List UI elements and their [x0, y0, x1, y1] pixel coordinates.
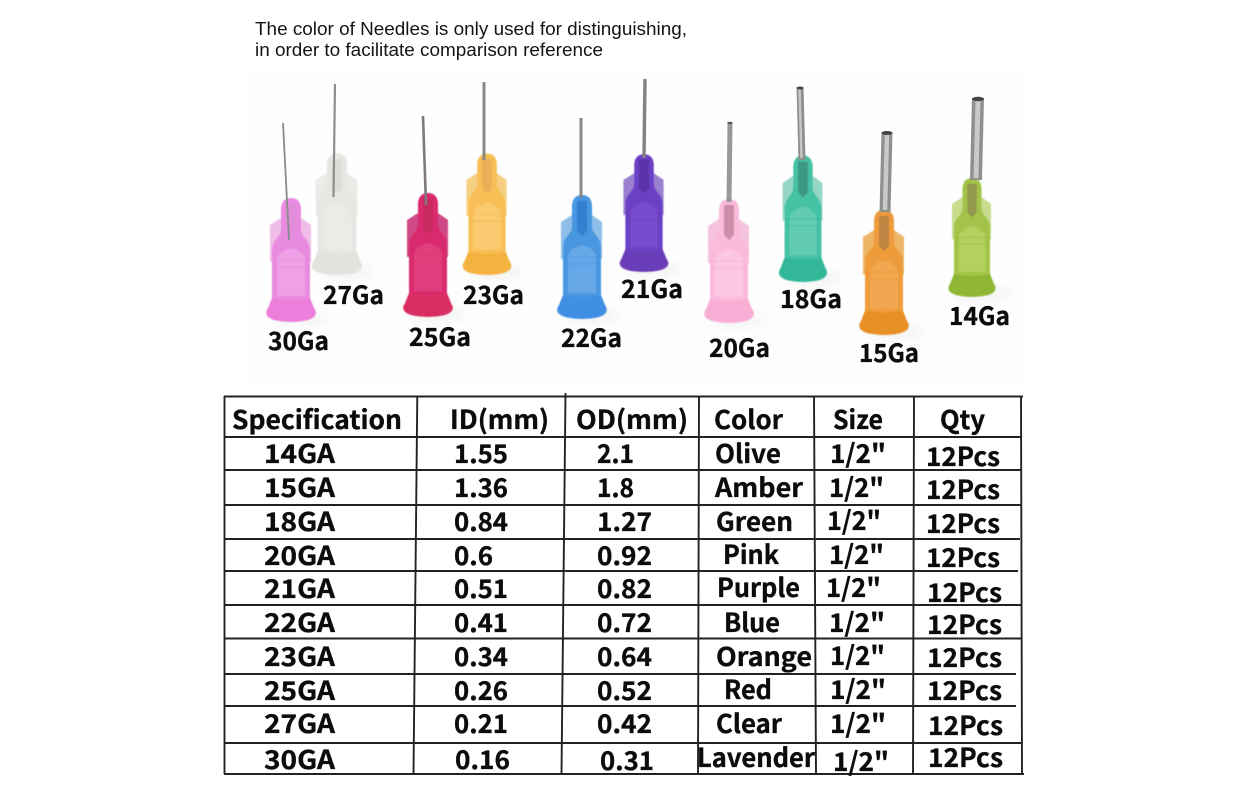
- needle 23Ga amber: [463, 82, 524, 276]
- row 22GA: 1/2": [829, 603, 885, 640]
- row 30GA: [264, 738, 1003, 779]
- row 25GA: 12Pcs: [927, 671, 1002, 708]
- row 15GA: [264, 468, 1000, 507]
- row 20GA: Pink: [723, 535, 779, 572]
- row 14GA: 2.1: [597, 434, 634, 471]
- row 21GA: 0.51: [454, 569, 508, 606]
- row 20GA: 0.6: [454, 536, 493, 573]
- row 22GA: 22GA: [264, 603, 335, 640]
- table header: Qty: [940, 400, 985, 437]
- gauge labels on the photo: 25Ga: [409, 318, 471, 354]
- needle 27Ga clear: [312, 84, 374, 276]
- note text: in order to facilitate comparison reference: [255, 39, 603, 60]
- row 15GA: 12Pcs: [926, 470, 1000, 507]
- row 20GA: 12Pcs: [926, 538, 1000, 575]
- row 20GA: [264, 535, 1000, 575]
- row 22GA: [264, 603, 1002, 642]
- table header: ID(mm): [450, 400, 549, 437]
- row 30GA: 12Pcs: [928, 738, 1003, 775]
- photo panel: coloured needles: [245, 72, 1023, 390]
- row 27GA: [264, 704, 1003, 743]
- specification table: [224, 393, 1024, 779]
- gauge labels on the photo: 20Ga: [709, 329, 770, 365]
- row 14GA: [264, 434, 1000, 474]
- row 18GA: Green: [716, 502, 793, 539]
- table header: Size: [833, 400, 883, 437]
- gauge labels on the photo: 21Ga: [621, 270, 683, 306]
- row 23GA: 0.34: [454, 637, 508, 674]
- table header: Color: [714, 400, 784, 437]
- table header: OD(mm): [576, 400, 688, 437]
- row 18GA: 12Pcs: [926, 504, 1000, 541]
- table grid: [224, 393, 1024, 774]
- row 25GA: Red: [724, 670, 772, 707]
- row 22GA: 0.41: [454, 603, 508, 640]
- row 30GA: 1/2": [833, 742, 889, 779]
- table header: [232, 400, 985, 437]
- gauge labels on the photo: 15Ga: [859, 334, 919, 370]
- row 27GA: 0.42: [597, 704, 652, 741]
- gauge labels on the photo: 27Ga: [323, 276, 384, 312]
- needle 18Ga green: [779, 86, 844, 283]
- row 15GA: 1.36: [454, 468, 508, 505]
- table header: Specification: [232, 400, 402, 437]
- needle 20Ga pink: [704, 122, 768, 324]
- row 25GA: 1/2": [830, 670, 886, 707]
- row 25GA: 0.26: [454, 671, 508, 708]
- gauge labels on the photo: 14Ga: [949, 297, 1010, 333]
- row 23GA: Orange: [716, 637, 812, 674]
- row 18GA: 0.84: [454, 502, 508, 539]
- gauge labels on the photo: 18Ga: [780, 280, 842, 316]
- row 30GA: 0.31: [600, 741, 654, 778]
- row 14GA: 14GA: [264, 434, 335, 471]
- row 21GA: 1/2": [826, 568, 881, 605]
- row 22GA: Blue: [724, 603, 780, 640]
- row 22GA: 0.72: [597, 603, 652, 640]
- row 27GA: 27GA: [264, 704, 335, 741]
- row 18GA: 18GA: [264, 502, 335, 539]
- row 21GA: 21GA: [264, 569, 335, 606]
- gauge labels on the photo: 23Ga: [463, 276, 524, 312]
- row 20GA: 0.92: [597, 536, 652, 573]
- needle 15Ga amber: [859, 131, 924, 336]
- row 27GA: 1/2": [830, 704, 886, 741]
- row 21GA: [264, 568, 1002, 610]
- row 21GA: 0.82: [597, 569, 652, 606]
- row 15GA: 15GA: [264, 468, 335, 505]
- row 30GA: Lavender: [697, 738, 816, 775]
- row 18GA: [264, 501, 1000, 541]
- row 23GA: 0.64: [597, 637, 652, 674]
- needle 25Ga red: [403, 116, 468, 318]
- row 27GA: 0.21: [454, 704, 508, 741]
- row 30GA: 0.16: [455, 740, 510, 777]
- row 23GA: 23GA: [264, 637, 335, 674]
- needle 22Ga blue: [557, 118, 622, 320]
- needle 21Ga purple: [620, 79, 682, 273]
- row 15GA: 1/2": [829, 468, 884, 505]
- gauge labels on the photo: 22Ga: [561, 319, 622, 355]
- row 20GA: 1/2": [829, 535, 884, 572]
- note text: [255, 18, 687, 60]
- row 18GA: 1.27: [597, 502, 652, 539]
- row 21GA: Purple: [717, 568, 800, 605]
- row 25GA: 25GA: [264, 671, 335, 708]
- row 14GA: 12Pcs: [926, 437, 1000, 474]
- row 20GA: 20GA: [264, 536, 335, 573]
- row 18GA: 1/2": [827, 501, 881, 538]
- row 27GA: Clear: [716, 704, 783, 741]
- row 22GA: 12Pcs: [927, 605, 1002, 642]
- row 27GA: 12Pcs: [928, 706, 1003, 743]
- row 23GA: 12Pcs: [927, 638, 1002, 675]
- row 25GA: 0.52: [597, 671, 652, 708]
- row 15GA: 1.8: [597, 468, 634, 505]
- row 14GA: 1/2": [830, 434, 886, 471]
- gauge labels on the photo: 30Ga: [268, 322, 329, 358]
- row 14GA: Olive: [715, 434, 781, 471]
- gauge labels on the photo: [268, 270, 1010, 370]
- row 30GA: 30GA: [264, 740, 335, 777]
- row 23GA: [264, 636, 1002, 675]
- row 15GA: Amber: [714, 468, 804, 505]
- row 25GA: [264, 670, 1002, 708]
- needle 14Ga olive: [948, 97, 1014, 298]
- row 23GA: 1/2": [830, 636, 885, 673]
- note text: The color of Needles is only used for distinguishing,: [255, 18, 687, 39]
- needle 30Ga lavender: [266, 123, 330, 322]
- row 14GA: 1.55: [454, 434, 508, 471]
- row 21GA: 12Pcs: [927, 573, 1002, 610]
